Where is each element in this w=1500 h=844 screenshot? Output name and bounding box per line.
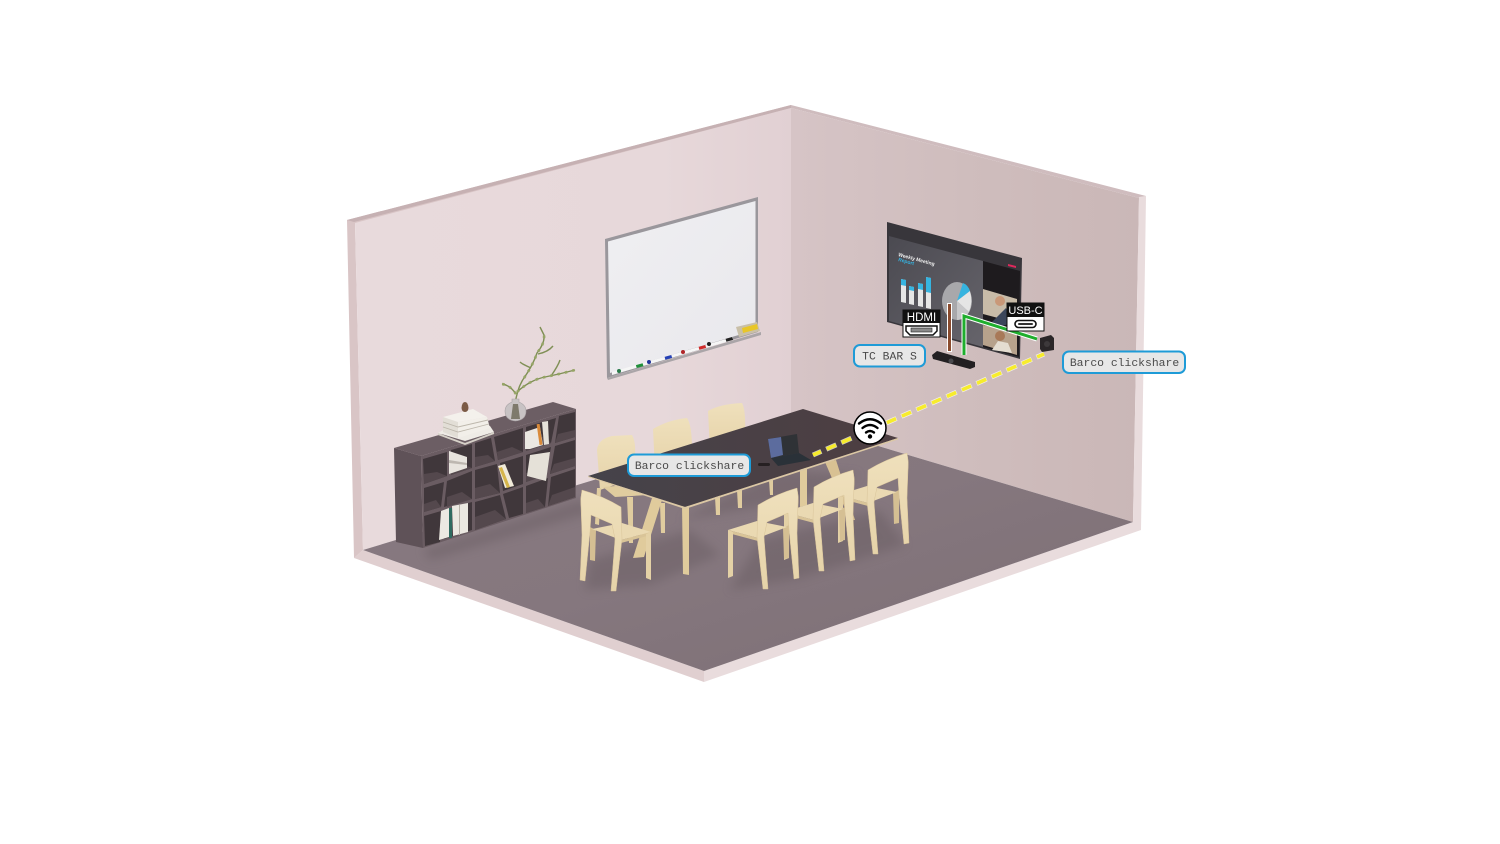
icon: wifi <box>854 412 886 444</box>
whiteboard markers <box>612 337 733 375</box>
shelf cells <box>423 412 575 546</box>
wireless link: dashed line <box>813 354 1044 455</box>
whiteboard eraser <box>736 322 760 337</box>
label: barco clickshare (receiver) <box>1063 352 1185 373</box>
cable: hdmi <box>947 303 952 352</box>
shelf floors <box>424 430 575 530</box>
label: tc bar s: TC BAR S <box>862 352 917 364</box>
cable: usb-c <box>964 316 1037 355</box>
label: hdmi <box>903 310 940 337</box>
label: barco clickshare (table) <box>628 454 750 476</box>
left wall <box>347 105 791 558</box>
label: usb-c: USB-C <box>1008 305 1043 317</box>
floor <box>363 420 1133 671</box>
laptop <box>758 434 811 466</box>
floor slab front edge <box>354 520 1141 682</box>
tv screen title: Report <box>897 257 915 267</box>
vase with branches <box>502 327 575 421</box>
label: barco clickshare (table): Barco clickshare <box>635 461 744 473</box>
table <box>588 409 898 575</box>
back chairs <box>595 403 773 543</box>
tv screen bar chart <box>901 277 931 309</box>
front chairs <box>580 453 909 591</box>
clickshare receiver <box>1040 335 1054 352</box>
label: barco clickshare (receiver): Barco clickshare <box>1070 358 1179 370</box>
floor shadows <box>423 470 905 590</box>
label: usb-c <box>1007 303 1044 331</box>
label: tc bar s <box>854 345 925 366</box>
whiteboard <box>605 197 761 380</box>
table legs <box>633 460 855 575</box>
tv screen <box>887 222 1022 359</box>
books on shelves <box>439 421 550 540</box>
bookshelf <box>394 327 576 548</box>
label: hdmi: HDMI <box>907 312 936 324</box>
right wall <box>791 105 1146 530</box>
tv screen title: Weekly Meeting <box>897 252 935 268</box>
tv screen pie chart <box>942 282 972 320</box>
soundbar: tc bar s <box>932 351 975 369</box>
tv screen video participants <box>983 289 1017 355</box>
stacked books and figurine <box>438 402 494 445</box>
